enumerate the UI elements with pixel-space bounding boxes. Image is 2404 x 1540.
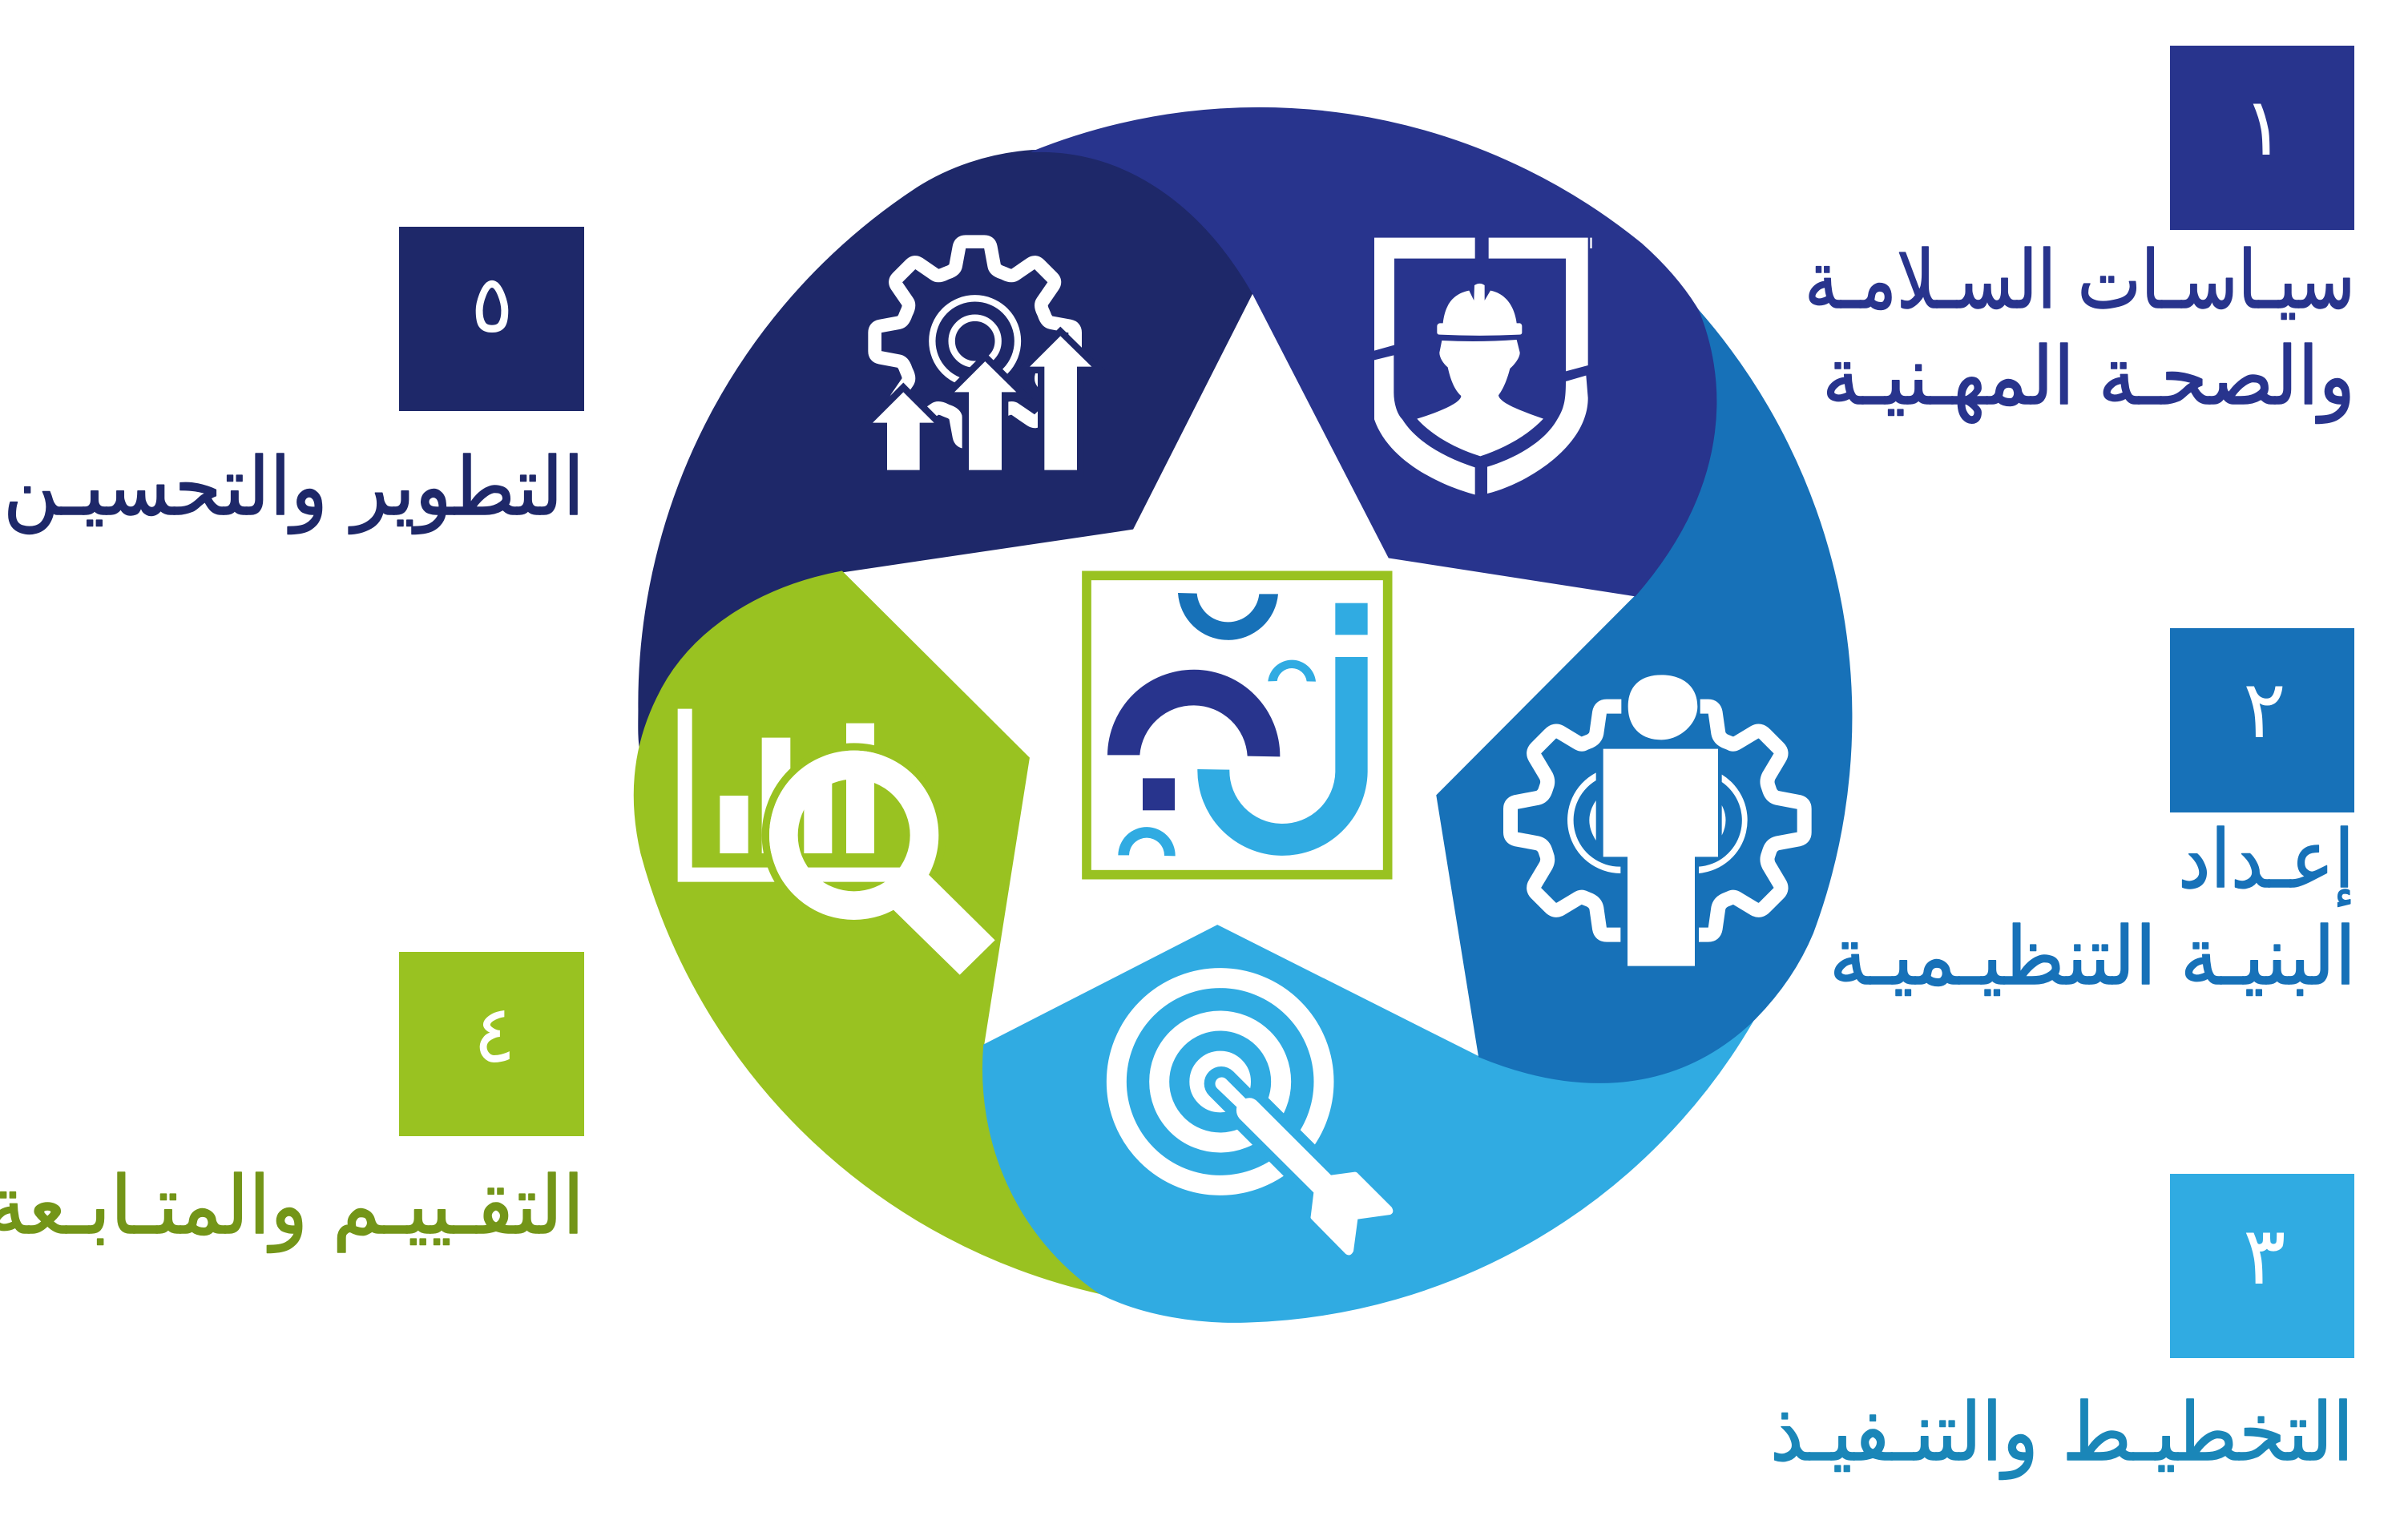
panel: five-segment circular star diagram — [634, 107, 1852, 1322]
gear rings — [932, 298, 1018, 384]
step 3 number box: ٣ — [2243, 1209, 2286, 1303]
person — [1603, 675, 1718, 966]
arrow gap — [1221, 1083, 1338, 1199]
logo J shape — [1197, 657, 1368, 856]
step 3 number box — [2170, 1174, 2354, 1358]
icon: target with arrow — [1116, 978, 1393, 1256]
worker bust — [1417, 340, 1543, 456]
step 2 label — [1829, 812, 2356, 1003]
step 2 number box: ٢ — [2243, 663, 2286, 756]
step 4 number box: ٤ — [473, 987, 516, 1081]
arrow — [1215, 1077, 1393, 1256]
gear outline — [875, 242, 1075, 442]
arrows — [873, 336, 1091, 470]
gear outline — [1511, 707, 1805, 935]
step 2 number box — [2170, 628, 2354, 812]
step 4 label: التقـييـم والمتـابـعة — [0, 1159, 584, 1253]
icon: gear with rising arrows — [873, 242, 1091, 470]
icon: bar chart with magnifying glass — [678, 709, 995, 975]
step 3 label: التخطيـط والتنـفيـذ — [1770, 1385, 2354, 1480]
step 4 number box — [399, 952, 584, 1136]
segment: step 3 cyan — [982, 925, 1753, 1322]
logo navy square — [1143, 778, 1175, 810]
gear inner arcs — [1567, 772, 1748, 873]
step 1 label: والصحـة المهـنيـة — [1822, 329, 2355, 424]
magnifier gap — [765, 747, 942, 924]
segment: step 1 royal blue — [1031, 107, 1716, 596]
icon: shield with worker in hard hat — [1374, 238, 1592, 494]
step 1 number box — [2170, 46, 2354, 230]
segment: step 4 green — [634, 571, 1099, 1293]
step 5 number box — [399, 227, 584, 411]
shield fragments — [1374, 238, 1592, 494]
logo mark arcs — [1178, 593, 1278, 640]
step 2 label: البنيـة التنظيـميـة — [1829, 909, 2356, 1003]
magnifier — [784, 764, 995, 975]
segment: step 2 blue — [1437, 310, 1852, 1082]
step 5 number box: ٥ — [470, 257, 514, 351]
logo lower arch — [1118, 827, 1176, 856]
logo small arch — [1268, 660, 1316, 682]
step 1 number box: ١ — [2242, 80, 2285, 174]
step 5 label: التطوير والتحسيـن — [3, 440, 584, 534]
step 2 label: إعـداد — [2178, 812, 2354, 907]
bar chart — [678, 709, 906, 882]
icon: person with gear — [1511, 675, 1805, 966]
target rings — [1116, 978, 1324, 1185]
step 1 label — [1805, 233, 2355, 424]
centre logo — [1087, 575, 1388, 875]
hard hat — [1437, 284, 1522, 336]
logo frame — [1087, 575, 1388, 875]
logo square cyan — [1335, 603, 1368, 635]
segment: step 5 navy — [639, 151, 1252, 774]
logo navy arch — [1107, 670, 1280, 756]
